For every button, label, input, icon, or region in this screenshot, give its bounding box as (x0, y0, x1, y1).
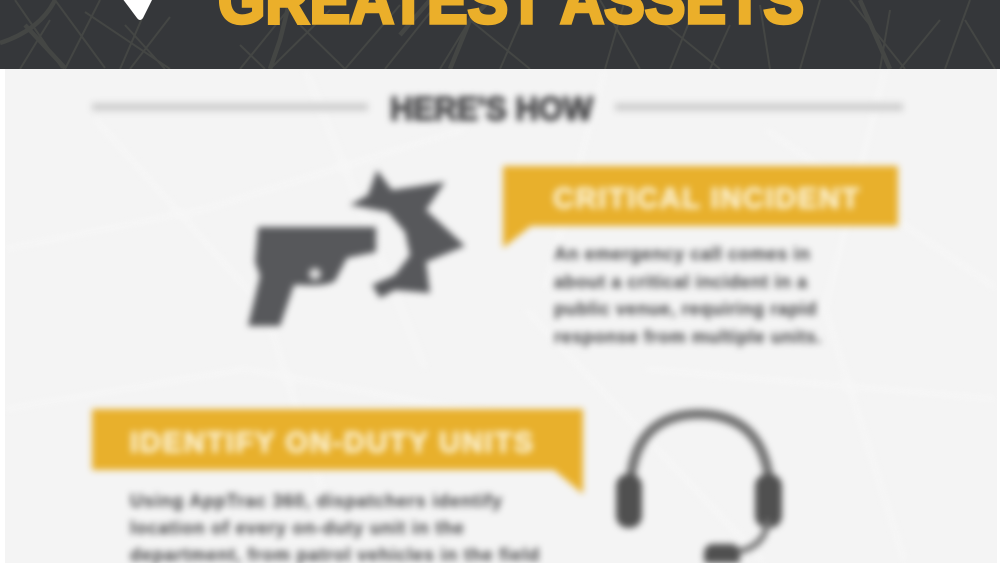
text: critical incident description: An emergency call comes in (554, 244, 810, 264)
section heading: Here's how: HERE'S HOW (390, 90, 594, 127)
text: identify units description: Using AppTrac 360, dispatchers identify (130, 491, 503, 511)
callout: critical incident (498, 160, 904, 251)
text: identify units description (126, 489, 544, 563)
icon: headset (610, 404, 788, 563)
callout: identify on-duty units (86, 404, 588, 497)
header band (0, 0, 1000, 69)
text: critical incident description: about a critical incident in a (554, 272, 808, 292)
icon: white map pin tip (124, 0, 152, 20)
text: critical incident description (550, 242, 823, 350)
section heading: Here's how (90, 90, 905, 127)
text: critical incident description: public venue, requiring rapid (554, 299, 817, 319)
text: identify units description: location of every on-duty unit in the (130, 518, 465, 538)
callout: critical incident: CRITICAL INCIDENT (553, 183, 859, 215)
text: critical incident description: response from multiple units. (554, 326, 822, 346)
icon: pistol firing with muzzle flash (244, 168, 468, 332)
callout: identify on-duty units: IDENTIFY ON-DUTY UNITS (130, 427, 533, 459)
